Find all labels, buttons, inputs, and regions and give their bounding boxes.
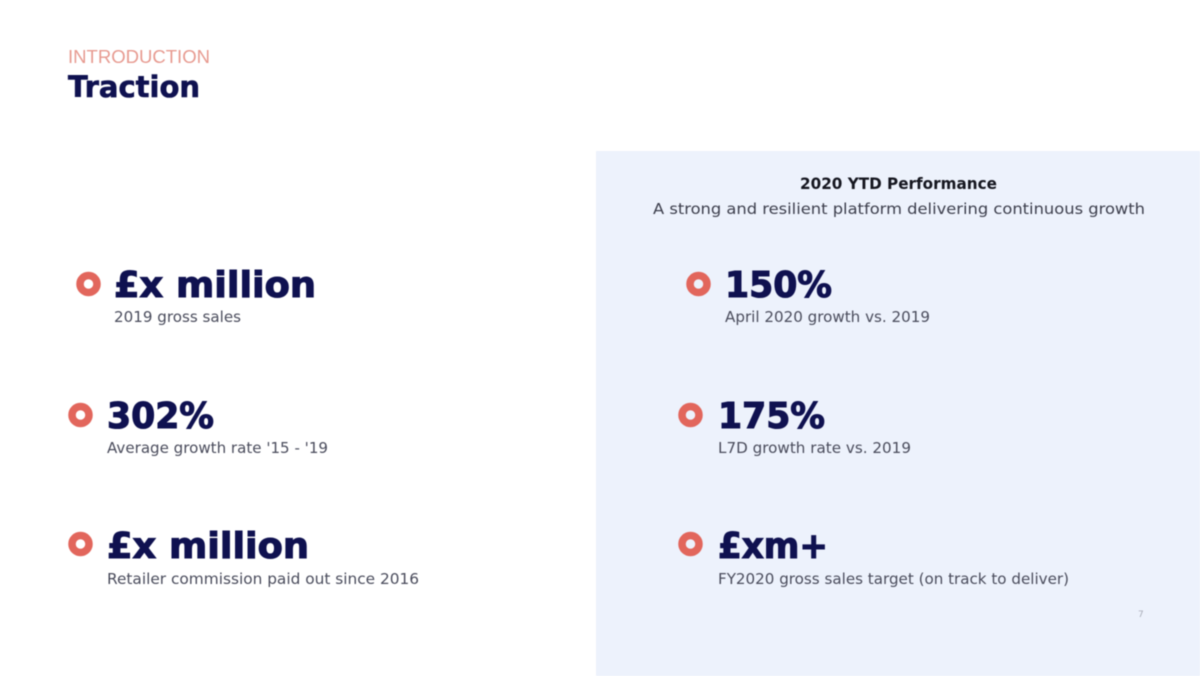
left metric: average growth rate <box>72 396 328 457</box>
right metric: L7D growth <box>682 396 911 457</box>
metric caption: Retailer commission paid out since 2016 <box>107 570 419 588</box>
metric value: 175% <box>718 396 825 437</box>
icon: ring bullet <box>72 536 89 552</box>
metric caption: L7D growth rate vs. 2019 <box>718 439 911 457</box>
metric caption: Average growth rate '15 - '19 <box>107 439 328 457</box>
metric value: 150% <box>725 265 832 306</box>
metric value: £x million <box>107 526 309 567</box>
left metric: gross sales <box>80 265 316 326</box>
metric value: 302% <box>107 396 214 437</box>
right metric: FY2020 target <box>682 526 1069 588</box>
icon: ring bullet <box>80 276 97 292</box>
metric caption: FY2020 gross sales target (on track to deliver) <box>718 570 1069 588</box>
icon: ring bullet <box>682 536 699 552</box>
panel subheading: A strong and resilient platform delivering continuous growth <box>653 200 1145 218</box>
icon: ring bullet <box>690 276 707 292</box>
icon: ring bullet <box>72 406 89 424</box>
panel: 2020 YTD performance background <box>596 151 1200 676</box>
metric value: £xm+ <box>718 526 828 567</box>
left metric: retailer commission <box>72 526 419 588</box>
icon: ring bullet <box>682 406 699 424</box>
metric value: £x million <box>114 265 316 306</box>
panel heading: 2020 YTD Performance <box>800 174 997 193</box>
metric caption: 2019 gross sales <box>114 308 241 326</box>
metric caption: April 2020 growth vs. 2019 <box>725 308 930 326</box>
section label: introduction: INTRODUCTION <box>68 47 210 67</box>
right metric: April growth <box>690 265 930 326</box>
title: Traction <box>68 70 200 104</box>
page number: 7 <box>1138 610 1144 620</box>
